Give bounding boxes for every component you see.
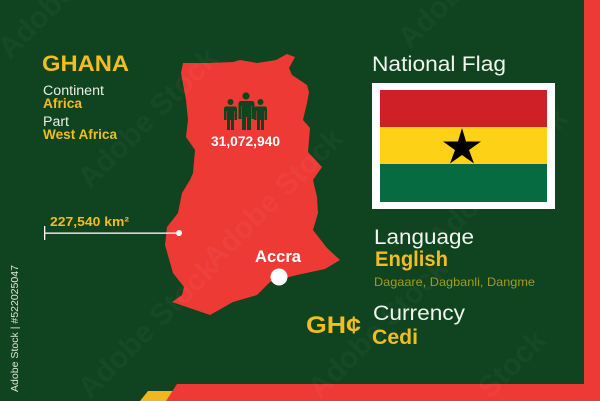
part info: Part [43,114,69,129]
icon: people [224,92,267,130]
continent info: Africa [43,96,83,111]
map of Ghana [165,54,340,315]
watermark: Adobe Stock [72,42,225,195]
part info: West Africa [43,127,117,142]
currency heading: Currency [373,302,466,325]
currency symbol: GH¢ [306,312,361,339]
stock id: Adobe Stock | #522025047 [9,265,21,392]
right red band [584,0,600,401]
watermark: Adobe Stock [302,252,455,401]
flag heading: National Flag [372,53,506,76]
part info [43,114,117,142]
continent info [43,83,104,111]
area callout: 227,540 km² [50,214,130,229]
title: GHANA [42,51,129,76]
currency value: Cedi [372,326,418,349]
other languages: Dagaare, Dagbanli, Dangme [374,275,535,289]
watermark: Adobe Stock [422,102,575,255]
population: 31,072,940 [211,134,280,149]
area callout [44,214,182,240]
watermark: Adobe Stock [72,252,225,401]
continent info: Continent [43,83,104,98]
capital label: Accra [255,248,302,266]
watermark: Adobe Stock [197,122,350,275]
bottom red band [166,384,600,401]
language heading: Language [374,226,474,249]
national flag [372,83,555,209]
capital marker [270,268,288,286]
language value: English [375,248,448,271]
bottom yellow accent [140,391,175,401]
